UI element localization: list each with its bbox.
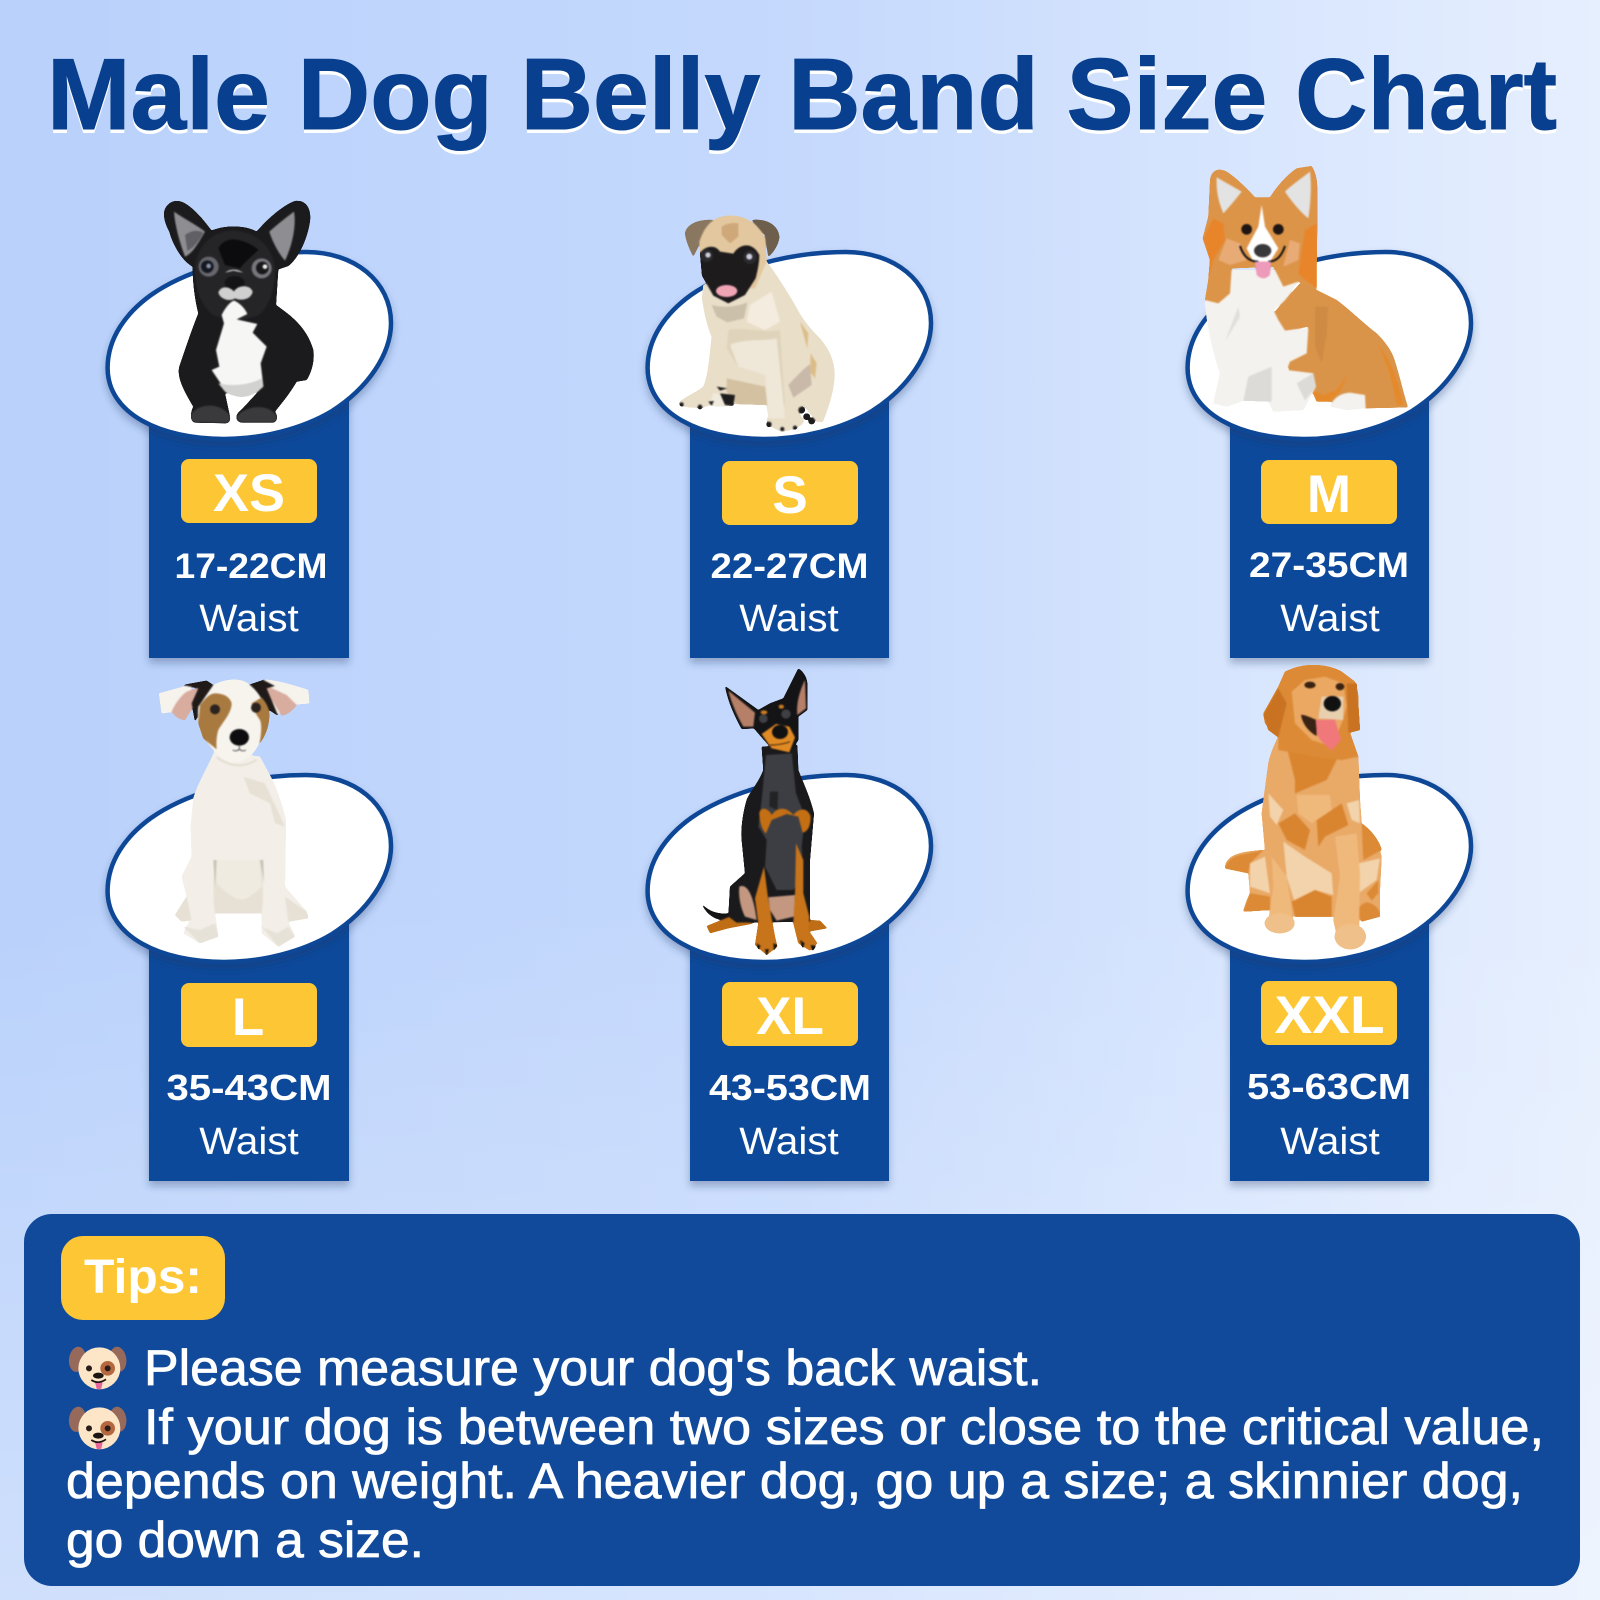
tips badge <box>61 1236 225 1320</box>
illustration: corgi <box>1203 166 1408 412</box>
size card: XXL: XXL <box>1274 986 1384 1045</box>
size card: S: Waist <box>739 598 839 640</box>
tips badge: Tips: <box>84 1251 202 1304</box>
ears <box>685 220 779 257</box>
size card: S: 22-27CM <box>710 547 868 586</box>
head <box>725 668 807 753</box>
size card: S: S <box>772 466 808 525</box>
size card: XS: 17-22CM <box>174 547 328 586</box>
size card: XXL: 53-63CM <box>1247 1066 1411 1107</box>
size card: XXL <box>1188 665 1471 1181</box>
body <box>1205 270 1408 412</box>
title: Male Dog Belly Band Size Chart <box>47 39 1557 151</box>
icon: dog face 2 <box>67 1406 128 1449</box>
tip text line 4: go down a size. <box>66 1512 424 1568</box>
size card: M <box>1188 166 1471 658</box>
tail and body <box>701 745 827 956</box>
illustration: pug <box>679 216 835 432</box>
tip text line 2: If your dog is between two sizes or close to the critical value, <box>144 1399 1544 1455</box>
body shading <box>712 292 817 418</box>
size card: M: M <box>1307 465 1351 524</box>
size card: L: 35-43CM <box>166 1067 332 1108</box>
tip text line 1: Please measure your dog's back waist. <box>144 1340 1042 1396</box>
size card: L: L <box>232 988 264 1047</box>
size card: XL: XL <box>756 987 824 1046</box>
size card: XS <box>108 201 391 658</box>
size card: XS: XS <box>213 464 285 523</box>
size card: XL: Waist <box>739 1121 839 1163</box>
illustration: French bulldog <box>164 201 314 423</box>
chest <box>212 301 267 397</box>
tips panel <box>24 1214 1580 1586</box>
size card: M: 27-35CM <box>1249 546 1409 585</box>
icon: dog face 1 <box>67 1346 128 1389</box>
size card: M: Waist <box>1280 598 1380 640</box>
head <box>1263 665 1360 760</box>
body <box>175 750 308 947</box>
size card: XL: 43-53CM <box>709 1067 871 1108</box>
title: Male Dog Belly Band Size Chart <box>47 42 1557 154</box>
size card: S <box>648 216 931 658</box>
head <box>1203 166 1317 303</box>
size card: L <box>108 679 391 1181</box>
ears <box>159 679 309 722</box>
face <box>195 231 275 319</box>
body <box>1225 733 1382 949</box>
head <box>699 216 767 303</box>
toes <box>680 387 815 431</box>
head <box>198 680 269 765</box>
paws <box>191 406 277 423</box>
size card: L: Waist <box>199 1121 299 1163</box>
size card: XXL: Waist <box>1280 1121 1380 1163</box>
illustration: miniature pinscher <box>701 668 827 956</box>
size card: XS: Waist <box>199 598 299 640</box>
tip text line 3: depends on weight. A heavier dog, go up a size; a skinnier dog, <box>66 1453 1523 1509</box>
illustration: Jack Russell terrier <box>159 679 309 947</box>
ears inner <box>174 212 295 261</box>
size card: XL <box>648 668 931 1181</box>
illustration: golden retriever <box>1225 665 1382 949</box>
